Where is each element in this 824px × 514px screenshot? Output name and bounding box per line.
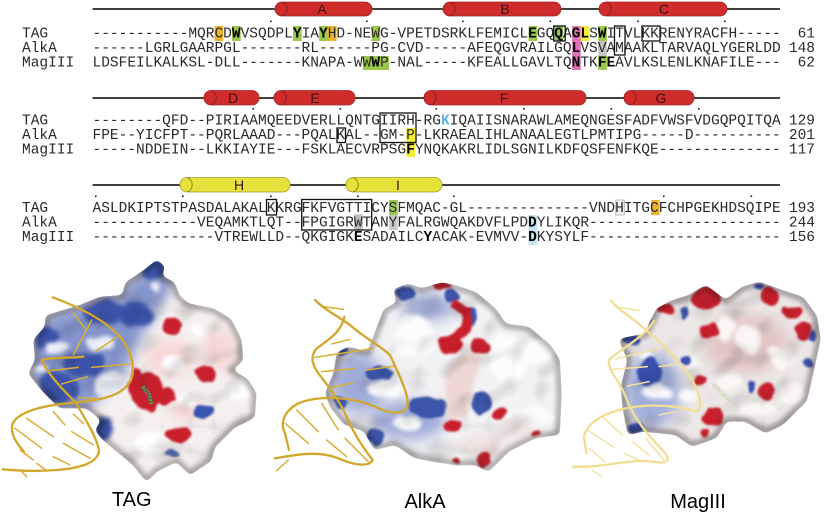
helix B: B [500,1,510,17]
structure: TAG surface with DNA [2,261,256,480]
helix H [180,177,290,193]
boxed residues [554,26,660,55]
sequence row: TAG: --------QFD--PIRIAAMQEEDVERLLQNTGIIRH-RGKIQAIISNARAWLAMEQNGESFADFVWSFVDGQPQITQA [92,114,781,130]
helix C: C [659,1,669,17]
residue highlights [406,128,415,157]
alignment block 1 [22,1,815,72]
sequence row: AlkA: ------------VEQAMKTLQT--FPGIGRWTANYFALRGWQAKDVFLPDDYLIKQR---------------------- [92,216,781,232]
sequence row: TAG: TAG [22,201,48,217]
residue highlights [215,26,607,70]
helix F: F [500,90,508,106]
helix G: G [656,90,666,106]
helix H: H [234,177,244,193]
label: MagIII: MagIII [670,491,726,513]
helix A [275,1,372,17]
sequence row: MagIII: MagIII [22,56,74,72]
label: AlkA: AlkA [404,491,446,513]
helix D: D [228,90,238,106]
sequence row: MagIII: LDSFEILKALKSL-DLL-------KNAPA-WWWP-NAL-----KFEALLGAVLTQNTKFEAVLKSLENLKNAFILE--- [92,56,781,72]
sequence row: AlkA: AlkA [22,216,57,232]
helix A: A [317,1,327,17]
ruler dots [252,108,700,110]
sequence row: AlkA: 201 [789,128,815,144]
helix I [346,177,442,193]
boxed residues [337,113,416,142]
sequence row: TAG: 129 [789,114,815,130]
helix D [204,90,259,106]
helix E: E [310,90,320,106]
ruler dots [95,196,752,197]
alignment block 2 [22,90,815,158]
helix C [599,1,727,17]
sequence row: AlkA: 244 [789,216,815,232]
alignment block 3 [22,177,815,246]
bound ligand [714,385,731,402]
sequence row: MagIII: --------------VTREWLLD--QKGIGKESADAILCYACAK-EVMVV-DKYSYLF---------------------- [92,230,781,246]
sequence row: TAG: 61 [798,26,815,42]
sequence row: MagIII: 62 [798,56,815,72]
helix E [274,90,355,106]
ruler dots [270,20,726,22]
structure: MagIII surface with DNA [572,282,820,477]
residue highlights [354,200,660,245]
helix G [624,90,694,106]
sequence row: MagIII: 117 [789,142,815,158]
sequence row: AlkA: FPE--YICFPT--PQRLAAAD---PQALKAL--GM-P-LKRAEALIHLANAALEGTLPMTIPG-----D---------- [92,128,781,144]
sequence row: MagIII: MagIII [22,230,74,246]
sequence row: AlkA: AlkA [22,41,57,57]
sequence row: AlkA: ------LGRLGAARPGL-------RL------PG-CVD-----AFEQGVRAILGQLVSVAMAAKLTARVAQLYGERLDD [92,41,781,57]
DNA duplex [573,301,700,476]
DNA duplex [3,297,133,477]
bound ligand [143,387,152,405]
label: TAG: TAG [112,489,152,511]
sequence row: TAG: TAG [22,114,48,130]
sequence row: AlkA: 148 [789,41,815,57]
sequence row: TAG: TAG [22,26,48,42]
sequence row: AlkA: AlkA [22,128,57,144]
sequence row: TAG: 193 [789,201,815,217]
helix F [424,90,586,106]
helix I: I [396,177,400,193]
sequence row: MagIII: 156 [789,230,815,246]
sequence row: MagIII: MagIII [22,142,74,158]
helix B [443,1,561,17]
boxed residues [266,200,372,230]
sequence row: TAG: -----------MQRCDWVSQDPLYIAYHD-NEWG-VPETDSRKLFEMICLEGQQAGLSWITVLKKRENYRACFH----- [92,26,781,42]
sequence row: TAG: ASLDKIPTSTPASDALAKALKKRGFKFVGTTICYSFMQAC-GL--------------VNDHITGCFCHPGEKHDSQIPE [92,201,781,217]
sequence row: MagIII: -----NDDEIN--LKKIAYIE---FSKLAECVRPSGFYNQKAKRLIDLSGNILKDFQSFENFKQE-------------- [92,142,781,158]
DNA duplex [275,300,408,471]
structure: AlkA surface with DNA [274,282,562,472]
